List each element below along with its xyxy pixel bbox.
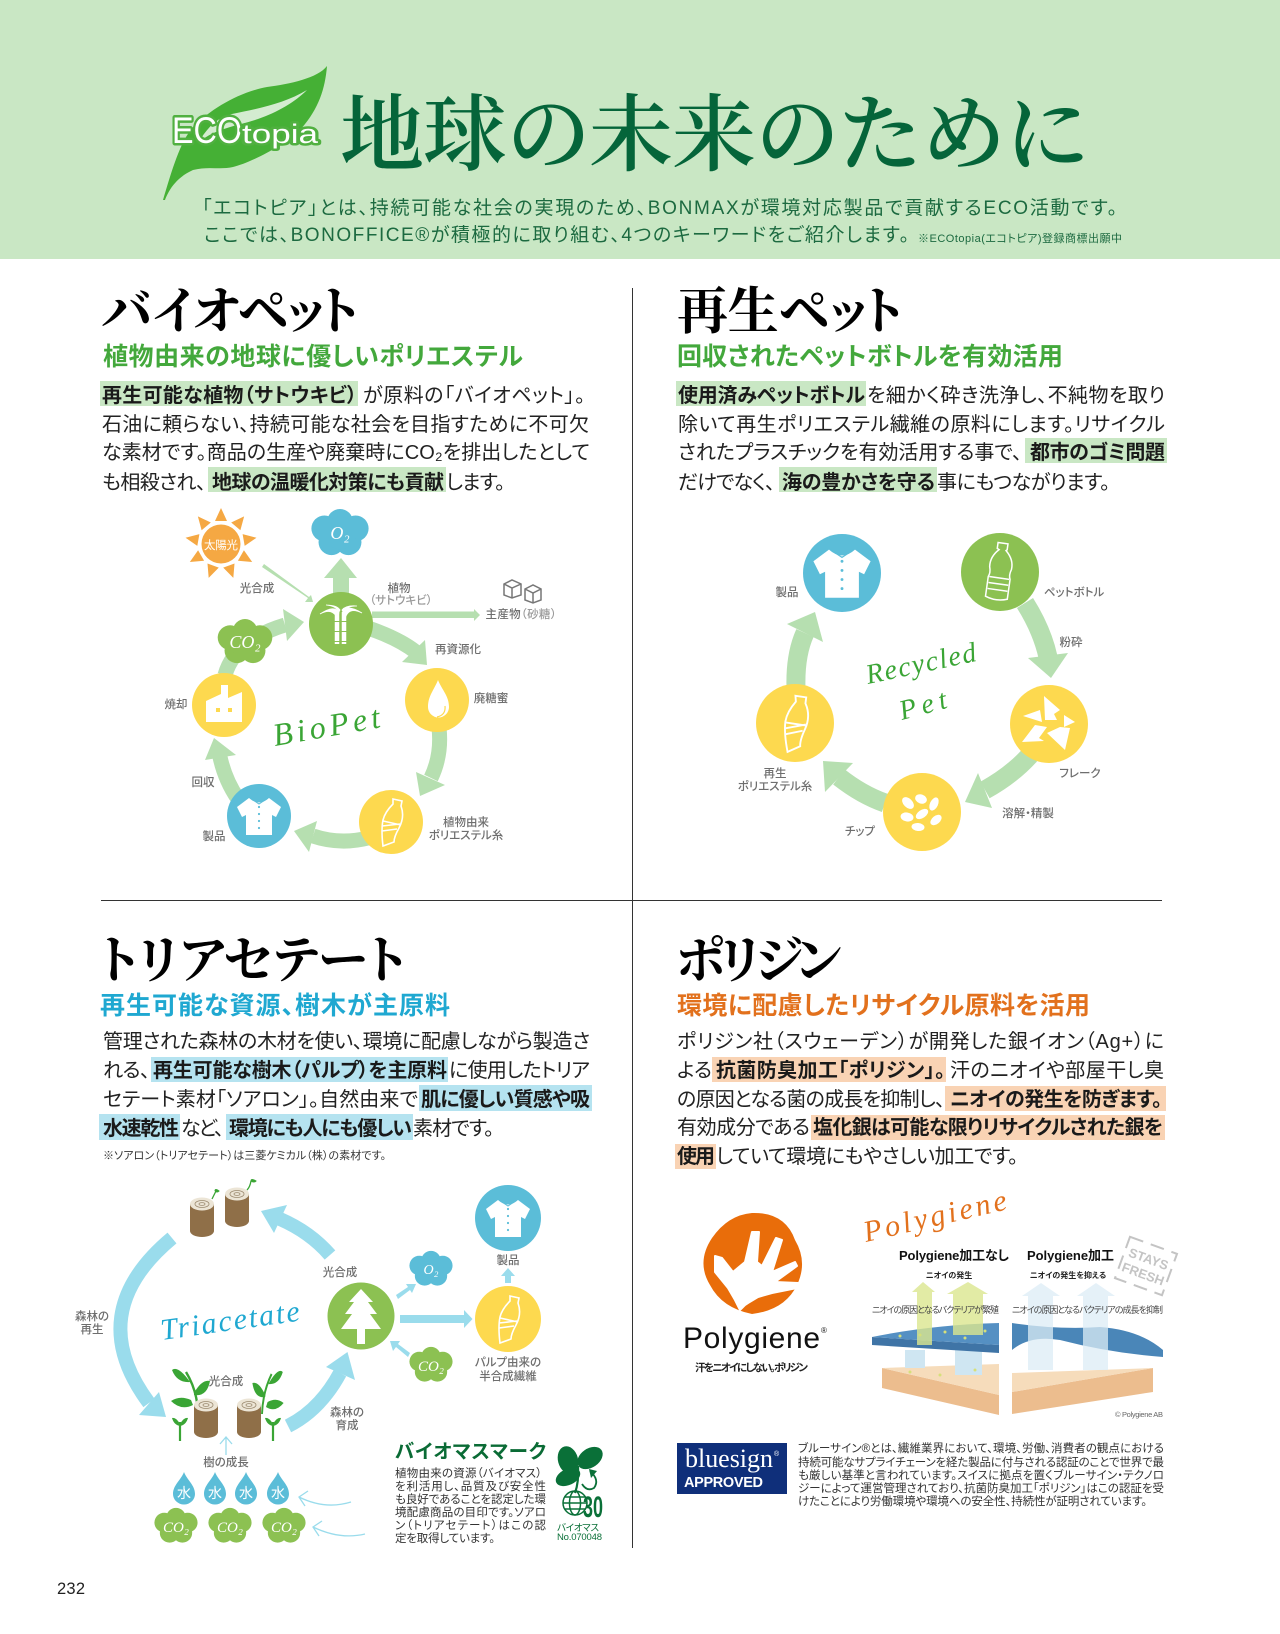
text: biomass description: [395, 1466, 546, 1545]
icon: factory circle: [192, 673, 256, 737]
cycle labels: 製品: [776, 585, 798, 599]
body text: recycled pet: だけでなく、: [678, 472, 775, 494]
biomass mark block: [395, 1441, 607, 1545]
logo: polygiene: ®: [821, 1326, 827, 1335]
cycle labels: 光合成: [240, 581, 275, 595]
header band: [0, 0, 1280, 259]
icon: CO2 cloud: CO₂: [418, 1359, 444, 1375]
cycle labels: 植物由来: [443, 815, 489, 829]
text: biomass description: を利活用し、品質及び安全性: [395, 1479, 546, 1493]
comparison: without polygiene: ニオイの原因となるバクテリアが繁殖: [872, 1304, 999, 1315]
icon: O2 cloud: O₂: [330, 523, 350, 543]
body text: polygiene: の原因となる菌の成長を抑制し、: [677, 1088, 945, 1111]
panel: recycled pet: [676, 270, 1167, 851]
cycle labels: [738, 585, 1105, 838]
icon: biomass logo: 30: [583, 1491, 603, 1524]
intro text: ※ECOtopia(エコトピア)登録商標出願中: [918, 231, 1122, 245]
logo: bluesign: ®: [774, 1450, 780, 1458]
stamp: stays fresh: STAYS: [1127, 1245, 1171, 1273]
title: 地球の未来のために: [340, 68, 1088, 189]
comparison: with polygiene: ニオイの発生を抑える: [1030, 1270, 1107, 1280]
body text: polygiene: 汗のニオイや部屋干し臭: [950, 1059, 1164, 1082]
icon: water drops: 水: [208, 1485, 222, 1501]
body text: biopet: 地球の温暖化対策にも貢献: [212, 471, 444, 494]
body text: recycled pet: [676, 381, 1167, 494]
icon: ECOtopia leaf logo: ECO: [172, 110, 242, 151]
cycle labels: [164, 581, 556, 843]
subheading: biopet: 植物由来の地球に優しいポリエステル: [103, 343, 523, 371]
cycle labels: チップ: [845, 825, 876, 838]
icon: lower stumps with sprouts: [171, 1369, 284, 1441]
icon: CO2 cloud: [409, 1347, 453, 1382]
cycle labels: 再生: [80, 1322, 104, 1336]
text: biomass description: 植物由来の資源（バイオマス）: [395, 1466, 542, 1480]
body text: polygiene: 有効成分である: [677, 1116, 810, 1139]
body text: triacetate: 水速乾性: [103, 1117, 179, 1140]
icon: biomass logo: [553, 1442, 607, 1543]
comparison: without polygiene: [872, 1248, 1009, 1415]
icon: water drops: 水: [239, 1485, 253, 1501]
body text: polygiene: [675, 1030, 1166, 1169]
body text: recycled pet: 事にもつながります。: [937, 471, 1110, 494]
logo: bluesign: [677, 1443, 787, 1494]
comparison: without polygiene: Polygiene加工なし: [899, 1248, 1009, 1263]
comparison: with polygiene: [1012, 1248, 1163, 1419]
icon: sun: 太陽光: [204, 538, 238, 552]
icon: O2 cloud: O₂: [424, 1263, 439, 1278]
stamp: stays fresh: [1115, 1237, 1177, 1295]
text: bluesign description: [798, 1441, 1164, 1508]
cycle labels: 光合成: [209, 1374, 244, 1388]
body text: recycled pet: されたプラスチックを有効活用する事で、: [678, 441, 1022, 464]
cycle labels: 主産物（砂糖）: [486, 607, 556, 621]
cycle labels: ペットボトル: [1044, 586, 1105, 599]
text: biomass description: 定を取得しています。: [395, 1532, 495, 1545]
icon: water drops: 水: [177, 1485, 191, 1501]
body text: triacetate: れる、: [103, 1060, 150, 1082]
cycle labels: 溶解・精製: [1002, 806, 1054, 820]
body text: triacetate: に使用したトリア: [449, 1059, 590, 1082]
icon: O2 cloud: [409, 1251, 453, 1286]
icon: CO2 clouds: CO₂: [217, 1520, 243, 1536]
icon: CO2 cloud: [218, 619, 272, 663]
body text: polygiene: よる: [677, 1060, 712, 1082]
heading: biopet: バイオペット: [101, 270, 359, 344]
icon: cubes: [504, 580, 541, 603]
body text: triacetate: 再生可能な樹木（パルプ）を主原料: [153, 1059, 447, 1082]
logo: bluesign: bluesign: [685, 1444, 773, 1473]
cycle labels: ポリエステル糸: [738, 779, 813, 793]
icon: molasses drop circle: [405, 668, 469, 732]
icon: flakes circle: [1010, 685, 1088, 763]
icon: O2 cloud: [311, 509, 369, 555]
icon: CO2 clouds: CO₂: [271, 1520, 297, 1536]
subheading: polygiene: 環境に配慮したリサイクル原料を活用: [677, 992, 1090, 1020]
cycle labels: （サトウキビ）: [370, 594, 432, 607]
panel: triacetate: [75, 919, 607, 1545]
cycle labels: 樹の成長: [203, 1455, 249, 1469]
chart: recycled pet cycle: [738, 533, 1105, 851]
cycle labels: 再生: [764, 766, 786, 780]
text: biomass description: 境配慮商品の目印です。ソアロ: [395, 1505, 546, 1519]
cycle labels: 半合成繊維: [479, 1369, 537, 1383]
icon: upper stumps: [190, 1180, 256, 1237]
chart: polygiene comparison: [872, 1237, 1177, 1419]
text: bluesign description: ブルーサイン®とは、繊維業界において、環境、労働、消費者の観点における: [798, 1441, 1164, 1455]
body text: polygiene: ポリジン社（スウェーデン）が開発した銀イオン（Ag+）に: [677, 1030, 1164, 1053]
panel: biopet: [100, 270, 590, 854]
icon: shirt circle: [803, 534, 881, 612]
cycle labels: パルプ由来の: [475, 1355, 541, 1369]
comparison: with polygiene: ニオイの原因となるバクテリアの成長を抑制: [1012, 1304, 1163, 1315]
cycle labels: 製品: [202, 829, 226, 843]
icon: water drops: 水: [271, 1485, 285, 1501]
icon: tree circle: [328, 1282, 394, 1350]
icon: CO2 clouds: [154, 1508, 306, 1543]
body text: recycled pet: 使用済みペットボトル: [678, 384, 865, 407]
body text: biopet: も相殺され、: [102, 471, 206, 494]
cycle labels: [75, 1253, 541, 1469]
subheading: recycled pet: 回収されたペットボトルを有効活用: [677, 343, 1063, 371]
body text: biopet: な素材です。商品の生産や廃棄時にCO₂を排出したとして: [102, 441, 590, 464]
icon: ECOtopia leaf logo: topia: [242, 119, 319, 149]
cycle labels: 廃糖蜜: [474, 691, 508, 705]
panel: polygiene: [675, 919, 1177, 1508]
body text: biopet: します。: [446, 472, 505, 494]
text: biomass description: も良好であることを認定した環: [395, 1492, 546, 1506]
text: bluesign description: ジーによって運営管理されており、抗菌防臭加工「ポリジン」はこの認証を受: [798, 1481, 1164, 1495]
heading: triacetate: トリアセテート: [100, 919, 406, 993]
logo: polygiene: [683, 1213, 827, 1374]
body text: recycled pet: を細かく砕き洗浄し、不純物を取り: [867, 384, 1165, 407]
body text: polygiene: 抗菌防臭加工「ポリジン」。: [716, 1059, 945, 1082]
icon: CO2 cloud: CO₂: [229, 632, 261, 652]
text: bluesign description: 持続可能なサプライチェーンを経た製品に付与される認証のことで世界で最: [798, 1455, 1164, 1469]
logo: polygiene: Polygiene: [683, 1322, 820, 1355]
comparison: with polygiene: Polygiene加工: [1027, 1248, 1114, 1263]
icon: fiber circle: [359, 790, 423, 854]
body text: polygiene: していて環境にもやさしい加工です。: [716, 1145, 1018, 1168]
icon: CO2 clouds: CO₂: [163, 1520, 189, 1536]
text: bluesign description: も厳しい基準と言われています。スイスに拠点を置くブルーサイン・テクノロ: [798, 1468, 1164, 1482]
text: bluesign description: けたことにより労働環境や環境への安全性、持続性が証明されています。: [798, 1494, 1147, 1508]
body text: polygiene: ニオイの発生を防ぎます。: [950, 1087, 1162, 1111]
icon: chips circle: [883, 773, 961, 851]
body text: recycled pet: 都市のゴミ問題: [1030, 440, 1165, 464]
icon: water drops: [173, 1472, 289, 1504]
icon: shirt circle: [227, 784, 291, 848]
script label: Recycled Pet: [862, 637, 980, 727]
comparison: without polygiene: ニオイの発生: [926, 1270, 972, 1280]
heading: recycled pet: 再生ペット: [677, 270, 903, 344]
cycle labels: 植物: [388, 581, 410, 595]
subheading: triacetate: 再生可能な資源、樹木が主原料: [100, 991, 450, 1020]
stamp: stays fresh: FRESH: [1120, 1259, 1166, 1289]
icon: biomass logo: バイオマス: [557, 1523, 599, 1534]
heading: polygiene: ポリジン: [675, 919, 842, 993]
script label: BioPet: BioPet: [270, 698, 384, 753]
cycle labels: 光合成: [323, 1265, 358, 1279]
body text: biopet: 石油に頼らない、持続可能な社会を目指すために不可欠: [102, 413, 589, 436]
icon: bottle circle: [961, 533, 1039, 611]
cycle labels: フレーク: [1059, 767, 1101, 780]
cycle labels: 育成: [336, 1418, 359, 1432]
icon: biomass logo: No.070048: [557, 1532, 602, 1543]
body text: triacetate: セテート素材「ソアロン」。自然由来で: [103, 1088, 418, 1111]
body text: biopet: が原料の「バイオペット」。: [363, 384, 585, 407]
cycle labels: 森林の: [330, 1405, 364, 1419]
body text: triacetate: 環境にも人にも優しい: [229, 1117, 412, 1140]
page number: 232: [57, 1580, 85, 1598]
cycle labels: 森林の: [75, 1309, 109, 1323]
chart: triacetate cycle: [75, 1180, 541, 1543]
body text: polygiene: 使用: [677, 1145, 715, 1168]
intro text: [202, 197, 1122, 246]
cycle labels: 回収: [192, 776, 215, 789]
logo: bluesign: APPROVED: [684, 1475, 763, 1491]
body text: triacetate: [99, 1030, 592, 1140]
intro text: ここでは、BONOFFICE®が積極的に取り組む、4つのキーワードをご紹介します。: [204, 224, 909, 246]
text: biomass description: ン（トリアセテート）はこの認: [395, 1519, 546, 1532]
icon: sugarcane circle: [309, 592, 373, 656]
cycle labels: ポリエステル糸: [429, 828, 504, 842]
body text: triacetate: など、: [181, 1117, 224, 1140]
intro text: 「エコトピア」とは、持続可能な社会の実現のため、BONMAXが環境対応製品で貢献するECO活動です。: [202, 197, 1117, 219]
body text: triacetate: 素材です。: [413, 1117, 494, 1140]
cycle labels: 焼却: [164, 697, 188, 711]
script label: Recycled Pet: Pet: [895, 684, 951, 727]
icon: shirt circle: [475, 1185, 541, 1251]
script label: Polygiene: Polygiene: [859, 1184, 1010, 1249]
body text: recycled pet: 海の豊かさを守る: [782, 471, 935, 494]
script label: Triacetate: Triacetate: [158, 1295, 302, 1347]
comparison: with polygiene: © Polygiene AB: [1115, 1410, 1163, 1419]
body text: recycled pet: 除いて再生ポリエステル繊維の原料にします。リサイクル: [678, 413, 1165, 436]
icon: fiber circle: [475, 1286, 541, 1352]
cycle labels: 粉砕: [1060, 635, 1083, 649]
footnote: ※ソアロン（トリアセテート）は三菱ケミカル（株）の素材です。: [103, 1148, 386, 1162]
heading: biomass mark: バイオマスマーク: [395, 1441, 546, 1463]
chart: biopet cycle: [164, 508, 556, 854]
body text: triacetate: 管理された森林の木材を使い、環境に配慮しながら製造さ: [103, 1030, 590, 1053]
cycle labels: 製品: [496, 1253, 520, 1267]
cycle labels: 再資源化: [435, 642, 481, 656]
body text: biopet: 再生可能な植物（サトウキビ）: [102, 384, 357, 407]
icon: sun: [185, 508, 257, 580]
body text: triacetate: 肌に優しい質感や吸: [421, 1087, 590, 1111]
body text: biopet: [100, 381, 590, 494]
body text: polygiene: 塩化銀は可能な限りリサイクルされた銀を: [813, 1116, 1163, 1139]
icon: fiber circle: [756, 684, 834, 762]
icon: ECOtopia leaf logo: [163, 66, 327, 200]
logo: polygiene: 汗をニオイにしない。ポリジン: [695, 1361, 808, 1374]
script label: Recycled Pet: Recycled: [862, 637, 980, 691]
